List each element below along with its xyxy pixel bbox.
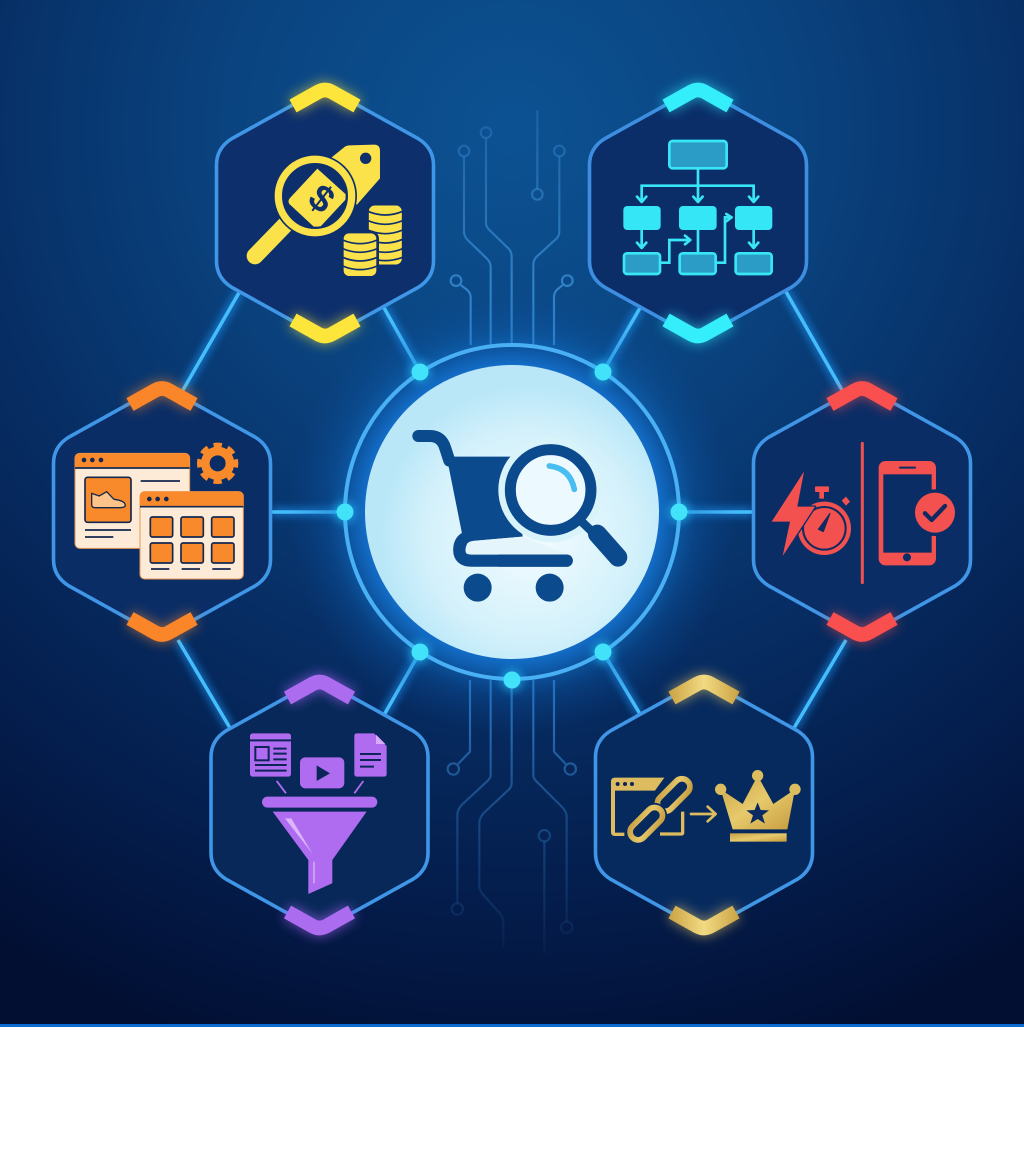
panel: price comparison hexagon (yellow) xyxy=(216,87,434,339)
hexagon frame xyxy=(54,386,270,638)
chevrons xyxy=(288,682,352,928)
panel: speed and mobile hexagon (red) xyxy=(754,386,970,638)
icon: shopping cart with magnifier xyxy=(418,436,618,602)
bottom accent line xyxy=(0,1024,1024,1027)
hexagon frame xyxy=(211,679,428,931)
panel: product pages hexagon (orange) xyxy=(54,386,270,638)
connector lines xyxy=(178,290,846,728)
hub disc xyxy=(365,365,659,659)
hexagon frame xyxy=(754,386,970,638)
panel: backlinks and authority hexagon (gold) xyxy=(596,679,812,931)
icon: link to crown xyxy=(611,770,801,843)
panel: content funnel hexagon (purple) xyxy=(211,679,428,931)
hexagon frame xyxy=(596,679,812,931)
chevrons xyxy=(666,90,730,336)
circuit traces: lower xyxy=(448,680,576,953)
icon: price tag, magnifier and coins: $ xyxy=(301,175,343,221)
chevrons xyxy=(293,90,357,336)
icon: stopwatch, lightning and phone xyxy=(772,443,958,583)
icon: web page windows and gear xyxy=(75,446,243,579)
panel: site architecture hexagon (cyan) xyxy=(590,87,806,339)
connector nodes xyxy=(335,362,689,690)
hub ring band xyxy=(345,345,679,679)
hub glow xyxy=(287,287,737,737)
central hub xyxy=(287,287,737,737)
chevrons xyxy=(830,388,894,634)
circuit traces: upper xyxy=(451,110,573,345)
hexagon frame xyxy=(590,87,806,339)
icon: price tag, magnifier and coins xyxy=(255,145,403,277)
chevrons xyxy=(672,682,736,928)
icon: content funnel xyxy=(250,733,387,894)
hexagon frame xyxy=(216,87,434,339)
icon: flow chart xyxy=(623,141,772,274)
chevrons xyxy=(130,388,194,634)
white footer area xyxy=(0,1027,1024,1154)
